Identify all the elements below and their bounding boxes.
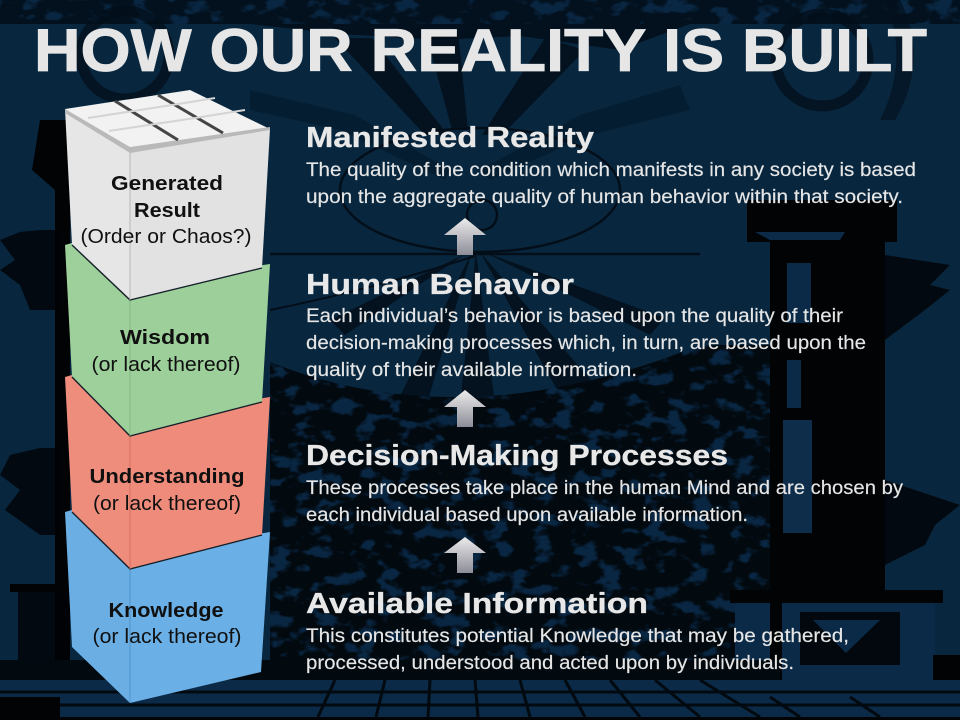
block: knowledge [65, 510, 270, 703]
section: manifested reality: upon the aggregate quality of human behavior within that society. [306, 187, 903, 208]
section: decision-making processes: These processes take place in the human Mind and are chosen by [306, 478, 904, 499]
section: human behavior: Human Behavior [306, 269, 574, 301]
section: decision-making processes: each individual based upon available information. [306, 505, 748, 526]
section: human behavior: quality of their available information. [306, 360, 637, 381]
block: wisdom: (or lack thereof) [92, 354, 240, 376]
section: human behavior [306, 269, 866, 381]
section: manifested reality: The quality of the condition which manifests in any society is based [306, 160, 916, 181]
block: generated result [65, 90, 270, 300]
block: generated result: Result [134, 200, 200, 222]
dome lines and rays [270, 128, 700, 310]
block: wisdom [65, 243, 270, 436]
block: knowledge: Knowledge [108, 600, 224, 622]
section: decision-making processes [306, 440, 904, 526]
section: manifested reality [306, 122, 916, 208]
block: wisdom: Wisdom [120, 327, 210, 349]
section: available information: Available Information [306, 588, 648, 620]
right pedestal [730, 590, 960, 700]
section: available information: processed, understood and acted upon by individuals. [306, 653, 794, 674]
central rays at top [335, 30, 585, 135]
block: understanding: (or lack thereof) [93, 493, 241, 515]
section: available information [306, 588, 849, 674]
title: HOW OUR REALITY IS BUILT [34, 17, 927, 84]
block: generated result: Generated [111, 173, 223, 195]
block: understanding [65, 375, 270, 569]
cube stack [65, 90, 270, 703]
arrow: information to decisions [444, 537, 486, 573]
arrow: decisions to behavior [444, 390, 486, 427]
arrow: behavior to reality [444, 218, 486, 255]
section: available information: This constitutes potential Knowledge that may be gathered, [306, 626, 849, 647]
block: generated result: (Order or Chaos?) [80, 226, 252, 248]
top band [0, 0, 960, 24]
block: understanding: Understanding [90, 466, 244, 488]
dark lower centre with navy patches [270, 345, 780, 680]
section: decision-making processes: Decision-Making Processes [306, 440, 728, 472]
floor tiles [0, 660, 960, 720]
section: human behavior: decision-making processes which, in turn, are based upon the [306, 333, 866, 354]
block: knowledge: (or lack thereof) [92, 626, 242, 648]
section: manifested reality: Manifested Reality [306, 122, 594, 154]
right column [747, 200, 960, 590]
left edge foliage and pedestal [0, 120, 70, 720]
section: human behavior: Each individual’s behavior is based upon the quality of their [306, 306, 844, 327]
